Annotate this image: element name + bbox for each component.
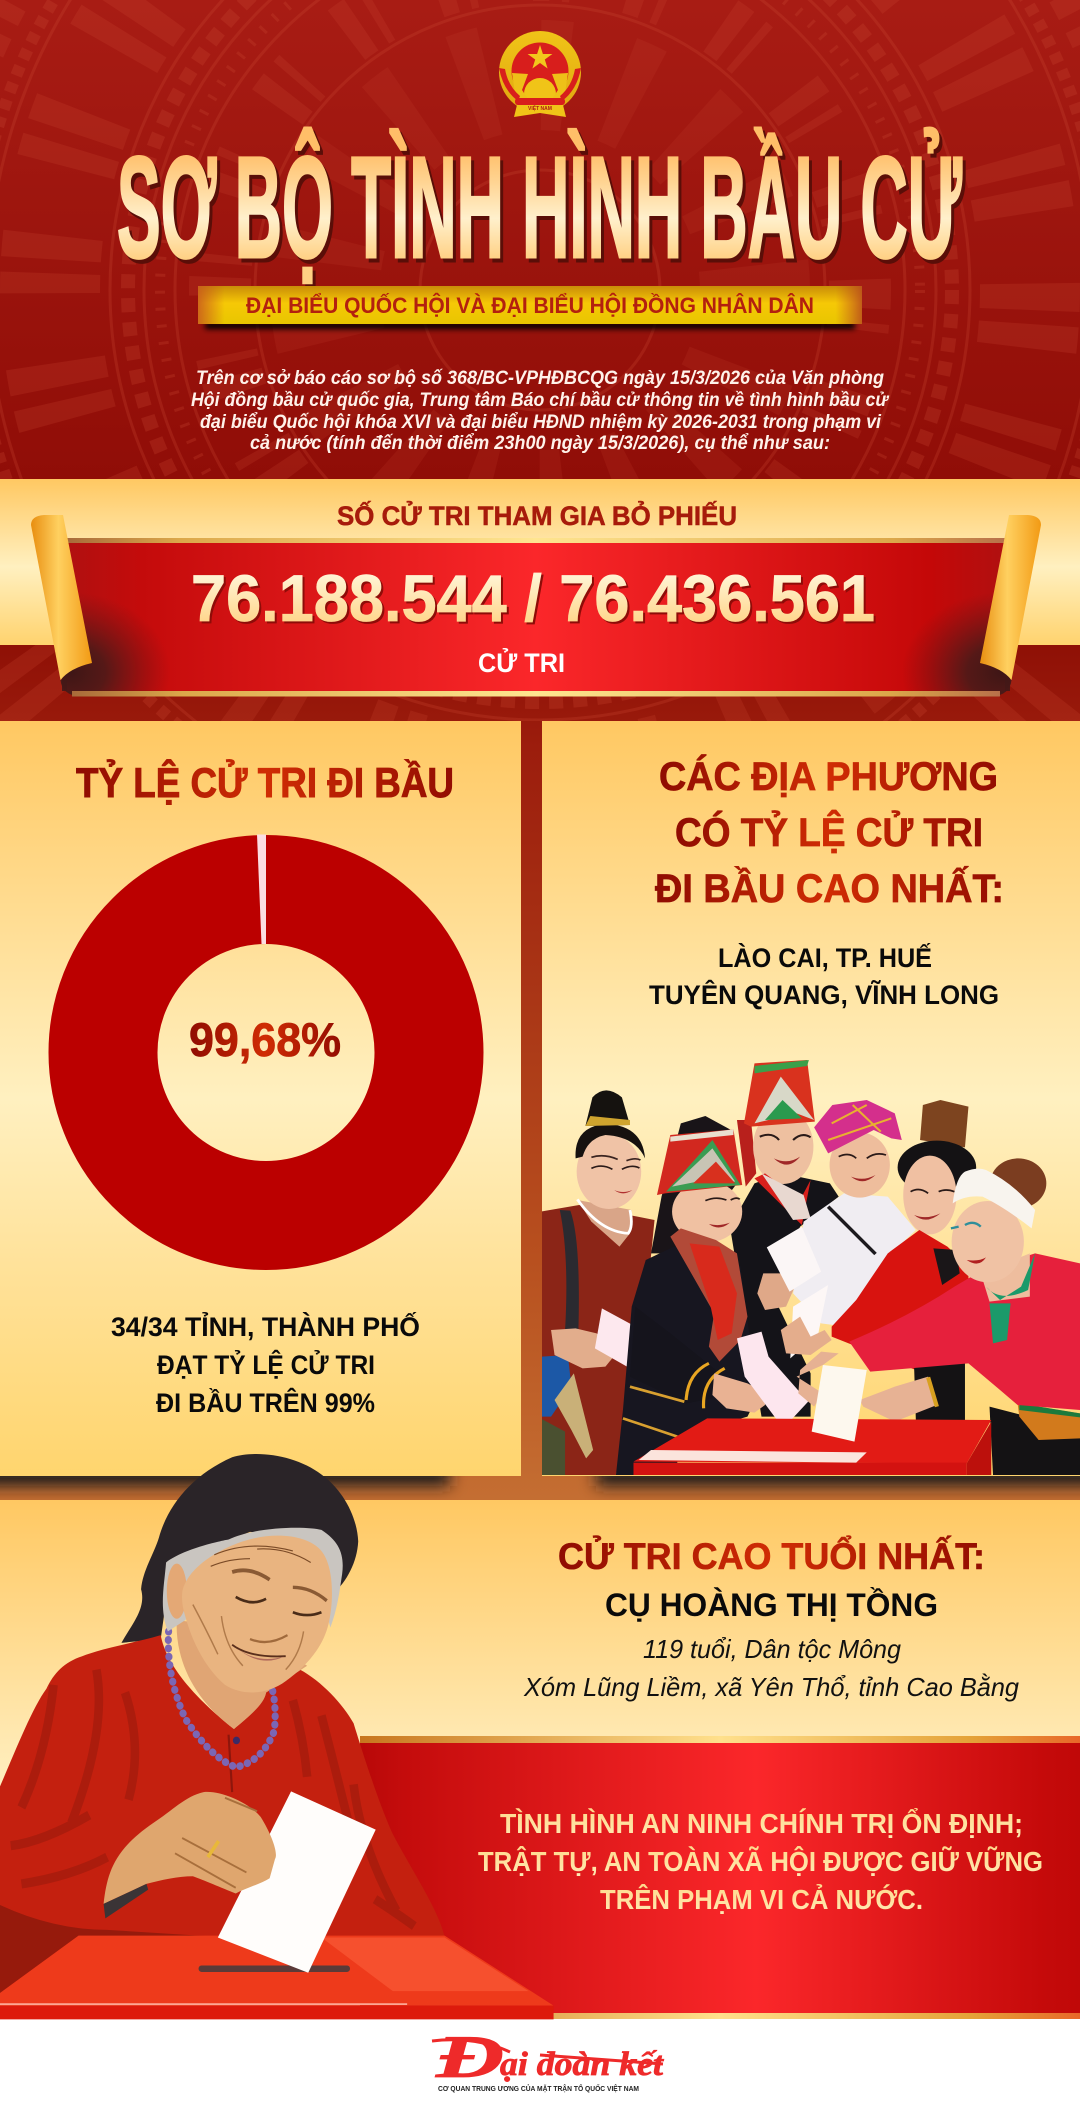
- security statement: TRÊN PHẠM VI CẢ NƯỚC.: [600, 1883, 923, 1915]
- neck: [177, 1620, 307, 1729]
- intro paragraph: Trên cơ sở báo cáo sơ bộ số 368/BC-VPHĐBCQG ngày 15/3/2026 của Văn phòng: [196, 368, 884, 389]
- person two: [616, 1116, 808, 1475]
- provinces list: [649, 942, 999, 1010]
- security statement: TRẬT TỰ, AN TOÀN XÃ HỘI ĐƯỢC GIỮ VỮNG: [478, 1845, 1043, 1877]
- background behind old voter: [0, 1790, 360, 2019]
- turnout percentage: 99,68%: [189, 1013, 341, 1066]
- voter count number: 76.188.544 / 76.436.561: [191, 561, 875, 635]
- panel: oldest voter background: [0, 1500, 1080, 1790]
- provinces note: 34/34 TỈNH, THÀNH PHỐ: [111, 1310, 420, 1342]
- panel: voters section background: [0, 479, 1080, 645]
- provinces heading: [655, 754, 1004, 911]
- security banner: [360, 1736, 1080, 2019]
- person one: [541, 1090, 663, 1475]
- elderly voter ballot box: [0, 1936, 554, 2019]
- voter unit label: CỬ TRI: [478, 646, 565, 678]
- provinces heading: ĐI BẦU CAO NHẤT:: [655, 865, 1004, 911]
- illustration: elderly voter: [0, 1454, 554, 2019]
- left scroll roll: [31, 515, 92, 680]
- logo wordmark: ại đoàn kết: [500, 2046, 665, 2083]
- emblem of Vietnam: [499, 31, 581, 117]
- person three: [730, 1060, 839, 1417]
- provinces note: ĐẠT TỶ LỆ CỬ TRI: [157, 1348, 375, 1380]
- oldest voter text: [523, 1534, 1020, 1702]
- person six: [797, 1158, 1080, 1475]
- provinces list: TUYÊN QUANG, VĨNH LONG: [649, 979, 999, 1010]
- provinces note: [111, 1310, 420, 1418]
- provinces list: LÀO CAI, TP. HUẾ: [718, 942, 932, 973]
- oldest voter address: Xóm Lũng Liềm, xã Yên Thổ, tỉnh Cao Bằng: [523, 1672, 1020, 1702]
- headscarf: [121, 1454, 358, 1643]
- provinces heading: CÁC ĐỊA PHƯƠNG: [659, 754, 998, 799]
- turnout heading: TỶ LỆ CỬ TRI ĐI BẦU: [76, 758, 454, 806]
- person five: [781, 1100, 976, 1420]
- provinces note: ĐI BẦU TRÊN 99%: [156, 1387, 375, 1418]
- grey hair: [163, 1528, 343, 1631]
- ballot box: [633, 1365, 991, 1475]
- footer logo: [432, 2024, 665, 2093]
- shadow under left panel: [0, 1462, 450, 1486]
- shadow under right panel: [596, 1462, 1080, 1486]
- necklace: [168, 1631, 275, 1767]
- subtitle ribbon: [198, 286, 862, 329]
- scroll banner: [31, 515, 1041, 696]
- facial features: [193, 1546, 327, 1670]
- illustration: ethnic voters at ballot box: [541, 1060, 1080, 1475]
- emblem of Vietnam: VIỆT NAM: [528, 104, 552, 112]
- lower red backdrop: [0, 479, 1080, 1500]
- panel: top provinces: [542, 721, 1080, 1476]
- intro paragraph: đại biểu Quốc hội khóa XVI và đại biểu HĐND nhiệm kỳ 2026-2031 trong phạm vi: [200, 412, 882, 433]
- header background: [0, 0, 1080, 479]
- red blouse: [0, 1635, 445, 1995]
- voters heading: SỐ CỬ TRI THAM GIA BỎ PHIẾU: [337, 499, 737, 531]
- subtitle ribbon: ĐẠI BIỂU QUỐC HỘI VÀ ĐẠI BIỂU HỘI ĐỒNG NHÂN DÂN: [246, 292, 814, 318]
- security statement: TÌNH HÌNH AN NINH CHÍNH TRỊ ỔN ĐỊNH;: [500, 1808, 1023, 1839]
- hand: [104, 1792, 276, 1918]
- logo wordmark: [432, 2024, 665, 2090]
- ear: [167, 1564, 187, 1619]
- oldest voter heading: CỬ TRI CAO TUỔI NHẤT:: [558, 1534, 985, 1577]
- logo wordmark: Đ: [434, 2024, 504, 2090]
- person four: [757, 1100, 916, 1358]
- panel: turnout rate: [0, 721, 521, 1476]
- provinces heading: CÓ TỶ LỆ CỬ TRI: [675, 809, 983, 855]
- logo tagline: CƠ QUAN TRUNG ƯƠNG CỦA MẶT TRẬN TỔ QUỐC VIỆT NAM: [438, 2083, 639, 2093]
- face: [182, 1536, 332, 1692]
- ballot: [218, 1791, 376, 1973]
- oldest voter age: 119 tuổi, Dân tộc Mông: [643, 1634, 902, 1664]
- drum pattern: [0, 0, 1080, 721]
- right scroll roll: [980, 515, 1041, 680]
- intro paragraph: Hội đồng bầu cử quốc gia, Trung tâm Báo chí bầu cử thông tin về tình hình bầu cử: [191, 390, 889, 411]
- intro paragraph: cả nước (tính đến thời điểm 23h00 ngày 15/3/2026), cụ thể như sau:: [250, 433, 830, 454]
- donut chart: [103, 834, 429, 1216]
- intro paragraph: [191, 368, 889, 454]
- oldest voter name: CỤ HOÀNG THỊ TỒNG: [605, 1587, 938, 1623]
- security statement: [478, 1808, 1043, 1915]
